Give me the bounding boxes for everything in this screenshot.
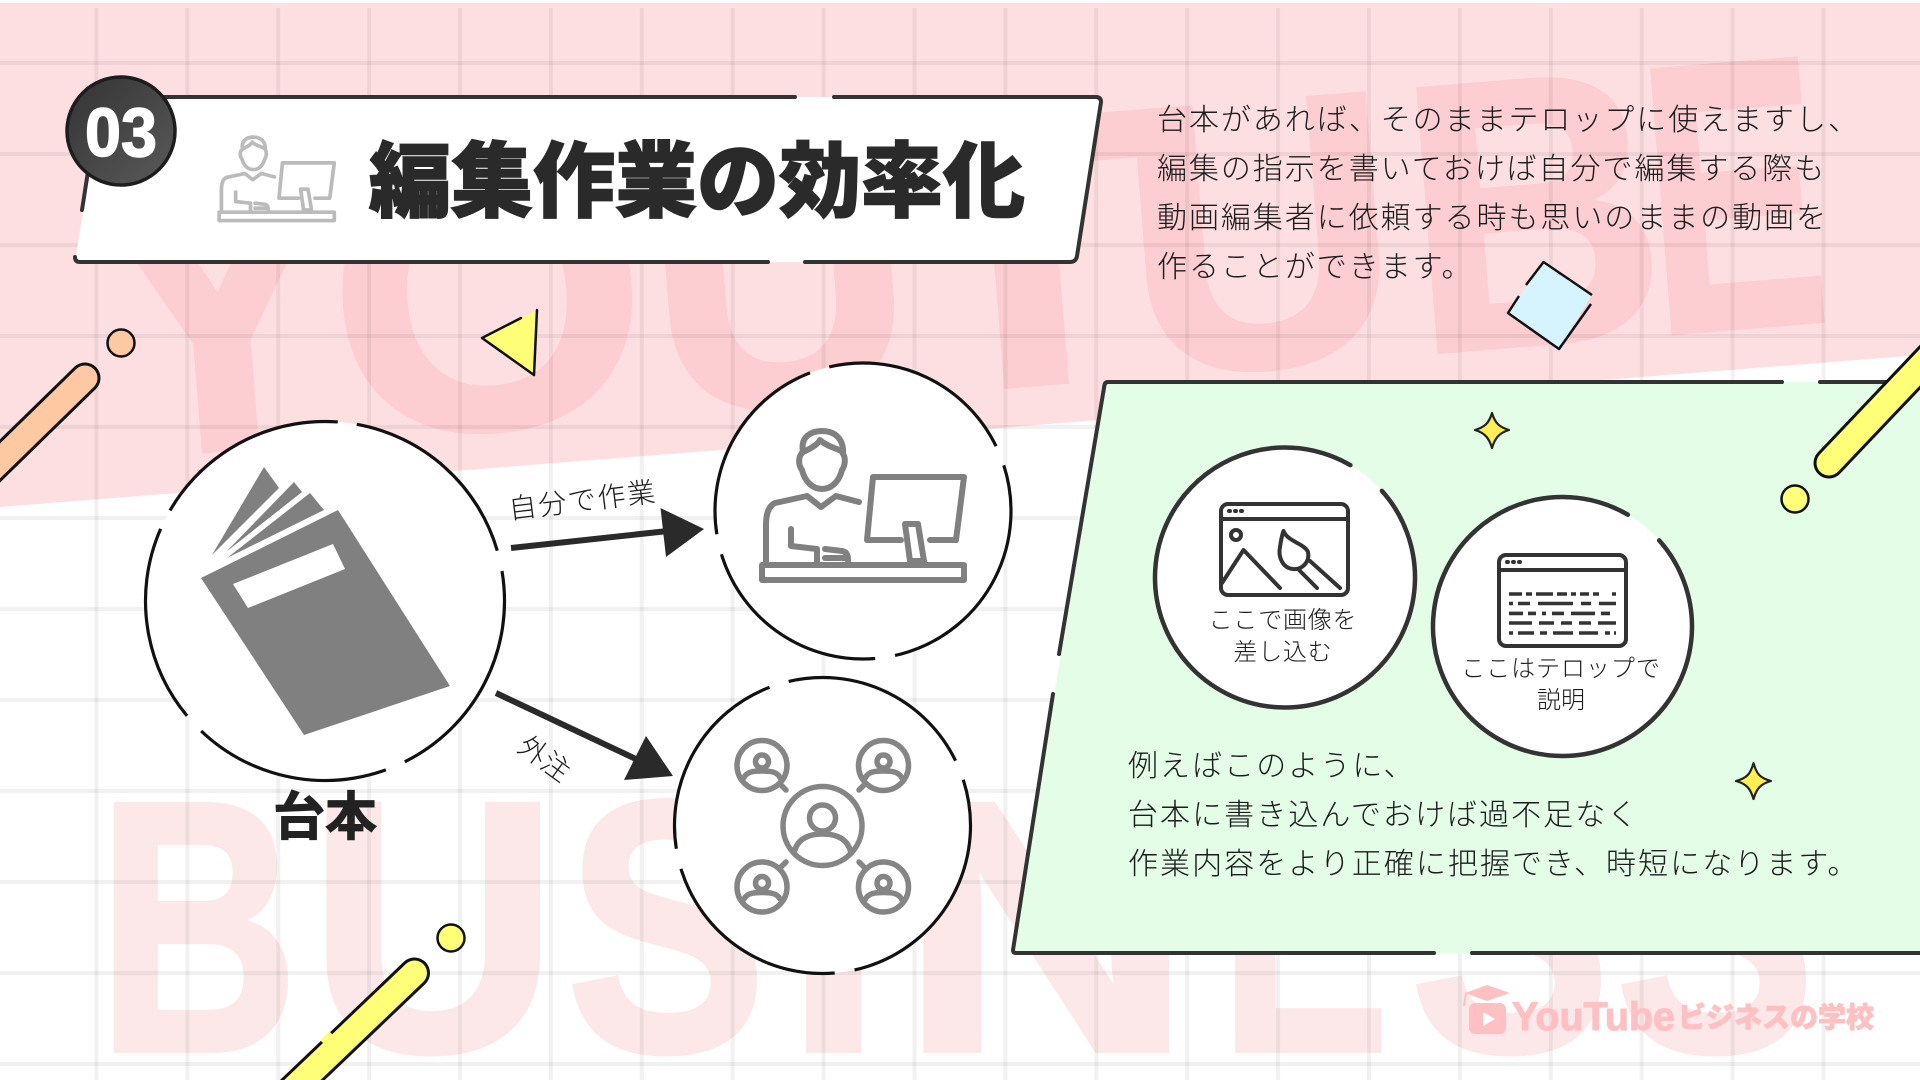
icon: image window with brush (1221, 504, 1348, 595)
circle: outsourcing (636, 639, 1009, 1012)
circle: image note (1101, 394, 1469, 761)
arrow: to self work (511, 508, 704, 557)
example explanation text: 例えばこのように、 (1128, 741, 1416, 785)
icon: book (201, 467, 450, 735)
circle: image note: 差し込む (1233, 632, 1333, 667)
decorative: blue diamond (1508, 262, 1592, 349)
icon: sparkle bottom (1736, 763, 1771, 799)
circle: self work (677, 325, 1049, 697)
title banner (75, 97, 1101, 262)
intro paragraph (1157, 95, 1860, 286)
icon: person at computer (762, 431, 964, 580)
icon: sparkle top (1475, 413, 1509, 448)
logo: YouTube business school (1464, 985, 1874, 1039)
intro paragraph: 動画編集者に依頼する時も思いのままの動画を (1157, 193, 1828, 237)
watermark: YOUTUBE: U (630, 49, 928, 496)
intro paragraph: 台本があれば、そのままテロップに使えますし、 (1157, 95, 1860, 139)
arrow label: 自分で作業: 自分で作業 (506, 470, 659, 528)
panel: green example area (1013, 382, 1920, 953)
circle: telop note (1380, 444, 1745, 809)
example explanation text (1128, 741, 1859, 883)
label: 台本: 台本 (273, 775, 377, 850)
decorative: yellow triangle (482, 310, 537, 375)
watermark: YOUTUBE (138, 56, 1824, 454)
icon: people network (737, 740, 908, 912)
circle: script source (118, 394, 532, 808)
watermark: YOUTUBE: O (312, 70, 663, 521)
number badge 03: 03 (85, 94, 157, 171)
pink diagonal background band (0, 3, 1920, 507)
arrow: to outsourcing (496, 693, 673, 780)
example explanation text: 台本に書き込んでおけば過不足なく (1128, 790, 1639, 834)
circle: telop note: 説明 (1537, 680, 1585, 715)
watermark: YOUTUBE: T (883, 30, 1169, 475)
watermark: BUSINESS (97, 726, 1816, 1080)
icon: faded person at computer (219, 137, 334, 221)
logo: YouTube business school: ビジネスの学校 (1678, 996, 1874, 1036)
caption: ここで画像を (1209, 600, 1357, 635)
number badge 03 (67, 77, 175, 185)
decorative: yellow stick bottom (272, 924, 464, 1080)
decorative: peach stick (0, 330, 134, 500)
caption: ここはテロップで (1461, 648, 1661, 684)
arrow label: 外注: 外注 (511, 725, 580, 790)
example explanation text: 作業内容をより正確に把握でき、時短になります。 (1128, 839, 1859, 883)
watermark: YOUTUBE: Y (81, 95, 359, 540)
watermark: YOUTUBE: U (1106, 9, 1414, 457)
icon: text window (1499, 555, 1626, 646)
intro paragraph: 編集の指示を書いておけば自分で編集する際も (1157, 144, 1826, 188)
heading: 編集作業の効率化 (369, 115, 1025, 234)
watermark: YOUTUBE: B (1389, 0, 1678, 435)
icon: play box with graduation cap (1464, 985, 1510, 1034)
decorative: yellow stick top right (1782, 325, 1920, 512)
logo text: YouTube (1512, 995, 1675, 1039)
intro paragraph: 作ることができます。 (1157, 242, 1474, 286)
